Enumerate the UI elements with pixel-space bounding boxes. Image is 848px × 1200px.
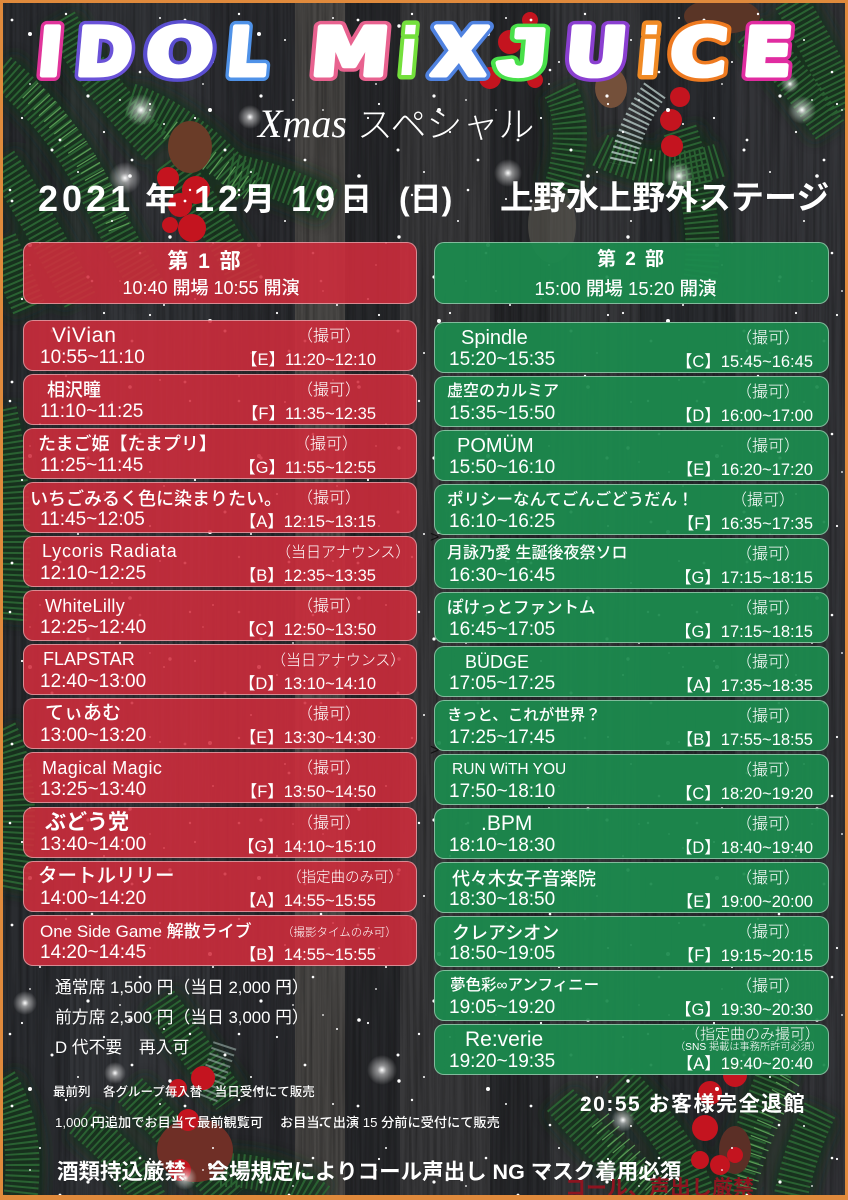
drink note: D 代不要 再入可 [55,1038,189,1057]
part 1 row: いちごみるく色に染まりたい。: 【A】12:15~13:15 [240,513,376,531]
part 2 row: 虚空のカルミア: 15:35~15:50 [449,403,555,424]
part 1 row: One Side Game: 【B】14:55~15:55 [240,946,376,964]
part 1 row: Lycoris Radiata: （当日アナウンス） [276,544,410,561]
part 2 row: 夢色彩∞アンフィニー: 夢色彩∞アンフィニー [450,977,599,994]
part 2 row: Re:verie: 【A】19:40~20:40 [677,1055,813,1073]
part 1 row: 相沢瞳: 相沢瞳 [47,380,101,400]
part 2 row: Re:verie: Re:verie [465,1028,543,1051]
part 2 row: 夢色彩∞アンフィニー [434,970,829,1021]
oshi note: 1,000 円追加でお目当て最前観覧可 お目当て出演 15 分前に受付にて販売 [55,1115,500,1130]
part 2 row: きっと、これが世界？: （撮可） [736,708,800,725]
title: IDOL MiXJUiCE: X [429,14,491,91]
closing time: 20:55 お客様完全退館 [580,1093,806,1116]
part 2 row: Spindle: Spindle [461,327,528,349]
part 2 row: Re:verie: （指定曲のみ撮可） [685,1026,820,1043]
part 1 row: ViVian: ViVian [52,324,117,347]
part 1 row: ぶどう党: 13:40~14:00 [40,834,146,855]
part 1 row: ViVian: 10:55~11:10 [40,347,145,368]
part 2 row: Spindle: （撮可） [736,330,800,347]
title: IDOL MiXJUiCE: L [224,14,271,91]
part 1 row: タートルリリー: 【A】14:55~15:55 [240,892,376,910]
part 1 row: Lycoris Radiata [23,536,417,587]
part 1 row: ViVian: （撮可） [297,328,361,345]
part 1 row: タートルリリー [23,861,417,912]
part 2 row: POMÜM: 15:50~16:10 [449,457,555,478]
part 1 row: たまご姫: （撮可） [294,436,358,453]
part 2 row: 夢色彩∞アンフィニー: （撮可） [736,978,800,995]
part 2 row: Spindle [434,322,829,373]
part 2 row: BÜDGE [434,646,829,697]
part 2 row: .BPM: （撮可） [736,816,800,833]
part 1 row: いちごみるく色に染まりたい。 [23,482,417,533]
date: 月 [243,181,275,217]
date: 年 [145,181,177,217]
date [38,178,452,219]
part 1 row: Magical Magic: 13:25~13:40 [40,779,146,800]
part 2 row: 月詠乃愛 生誕後夜祭ソロ: （撮可） [736,546,800,563]
part 2 row: 代々木女子音楽院: 代々木女子音楽院 [452,869,596,889]
part 2 row: BÜDGE: BÜDGE [465,652,529,672]
part 2 row: POMÜM [434,430,829,481]
title: IDOL MiXJUiCE: E [740,14,796,91]
part 2 row: POMÜM: 【E】16:20~17:20 [677,461,813,479]
title: IDOL MiXJUiCE: I [35,14,66,91]
part 1 row: WhiteLilly: 12:25~12:40 [40,617,146,638]
venue: 上野水上野外ステージ [500,179,829,216]
part 1 row: WhiteLilly [23,590,417,641]
part 2 row: 代々木女子音楽院: 18:30~18:50 [449,889,555,910]
part 2 row: きっと、これが世界？: きっと、これが世界？ [447,707,601,724]
part 1 row: One Side Game: （撮影タイムのみ可） [282,927,397,939]
part 2 row: RUN WiTH YOU [434,754,829,805]
part 1 row: いちごみるく色に染まりたい。: （撮可） [297,490,361,507]
pine cones and snowy branch [157,0,760,1182]
part 1 row: てぃあむ: てぃあむ [45,703,121,724]
part 2 row: 虚空のカルミア: 【D】16:00~17:00 [676,407,813,425]
title: IDOL MiXJUiCE: X [429,14,491,91]
part 1 row: てぃあむ: 13:00~13:20 [40,725,146,746]
part 2 row: きっと、これが世界？: 17:25~17:45 [449,727,555,748]
subtitle: Xmas スペシャル: Xmas スペシャル [258,101,534,146]
part 2 row: Re:verie: （SNS 掲載は事務所許可必須） [675,1042,821,1053]
part 1 row: FLAPSTAR: 12:40~13:00 [40,671,146,692]
part 2 row: 夢色彩∞アンフィニー: 【G】19:30~20:30 [675,1001,813,1019]
marker between columns: > [430,529,439,546]
part 1 row: Magical Magic: Magical Magic [42,758,162,778]
part 1 row: タートルリリー: （指定曲のみ可） [287,870,403,886]
part 2 row: ポリシーなんてごんごどうだん！: ポリシーなんてごんごどうだん！ [447,491,694,509]
part 2 row: RUN WiTH YOU: 17:50~18:10 [449,781,555,802]
part 2 row: 月詠乃愛 生誕後夜祭ソロ: 月詠乃愛 生誕後夜祭ソロ [447,545,627,562]
ticket price: front: 前方席 2,500 円（当日 3,000 円） [55,1008,309,1027]
part 1 row: Lycoris Radiata: 【B】12:35~13:35 [240,567,376,585]
title: IDOL MiXJUiCE: M [308,14,393,91]
date: 日 [340,181,372,217]
part 2 row: 虚空のカルミア [434,376,829,427]
part 2 row: POMÜM: （撮可） [736,438,800,455]
part 2 row: クレアシオン: （撮可） [736,924,800,941]
part 1 row: ViVian: 【E】11:20~12:10 [241,351,376,369]
part 1 row: Lycoris Radiata: 12:10~12:25 [40,563,146,584]
part 2 row: 月詠乃愛 生誕後夜祭ソロ [434,538,829,589]
part 2 row: RUN WiTH YOU: 【C】18:20~19:20 [676,785,813,803]
part 1 row: Magical Magic: （撮可） [297,760,361,777]
part 2 row: クレアシオン: 18:50~19:05 [449,943,555,964]
title: IDOL MiXJUiCE: C [667,14,731,91]
part 1 row: One Side Game: 14:20~14:45 [40,942,146,963]
red note: コール、声出し厳禁 [565,1177,754,1200]
date: 19 [291,178,339,219]
part 2 row: RUN WiTH YOU: RUN WiTH YOU [452,761,566,778]
part 1 row: WhiteLilly: （撮可） [297,598,361,615]
title: IDOL MiXJUiCE: O [143,14,217,91]
title: IDOL MiXJUiCE: U [562,14,631,91]
berries [157,12,747,1181]
part 2 row: 月詠乃愛 生誕後夜祭ソロ: 【G】17:15~18:15 [675,569,813,587]
title: IDOL MiXJUiCE: i [635,14,664,91]
part 1 row: FLAPSTAR: FLAPSTAR [43,649,135,669]
title: IDOL MiXJUiCE: E [740,14,796,91]
part 1 row: 相沢瞳: （撮可） [297,382,361,399]
title: IDOL MiXJUiCE: C [667,14,731,91]
part 1 row: ぶどう党: 【G】14:10~15:10 [238,838,376,856]
part 2 row: .BPM [434,808,829,859]
ticket price: regular: 通常席 1,500 円（当日 2,000 円） [55,978,309,997]
part 2 row: ポリシーなんてごんごどうだん！: （撮可） [731,492,795,509]
title: IDOL MiXJUiCE: i [395,14,422,91]
part 2 row: POMÜM: POMÜM [457,435,534,457]
panel: part 2 header: 15:00 開場 15:20 開演 [534,278,716,299]
panel: part 1 header [23,242,417,304]
part 1 row: ぶどう党: ぶどう党 [45,811,129,834]
part 1 row: たまご姫: 【G】11:55~12:55 [239,459,376,477]
part 1 row: Lycoris Radiata: Lycoris Radiata [42,541,177,561]
part 1 row: WhiteLilly: 【C】12:50~13:50 [239,621,376,639]
part 2 row: Re:verie: 19:20~19:35 [449,1051,555,1072]
part 1 row: たまご姫 [23,428,417,479]
part 1 row: いちごみるく色に染まりたい。: 11:45~12:05 [40,509,145,530]
part 1 row: WhiteLilly: WhiteLilly [45,596,125,616]
part 2 row: BÜDGE: 17:05~17:25 [449,673,555,694]
part 2 row: .BPM: .BPM [481,812,532,835]
part 2 row: ポリシーなんてごんごどうだん！: 【F】16:35~17:35 [678,515,813,533]
part 1 row: 相沢瞳 [23,374,417,425]
part 1 row: ぶどう党: （撮可） [297,815,361,832]
part 1 row: FLAPSTAR [23,644,417,695]
part 1 row: たまご姫: 11:25~11:45 [40,455,143,476]
part 1 row: Magical Magic: 【F】13:50~14:50 [241,783,376,801]
part 1 row: FLAPSTAR: 【D】13:10~14:10 [239,675,376,693]
part 2 row: クレアシオン: クレアシオン [452,923,559,943]
front row note: 最前列 各グループ毎入替 当日受付にて販売 [53,1085,315,1099]
part 2 row: 代々木女子音楽院: （撮可） [736,870,800,887]
part 2 row: ぽけっとファントム: （撮可） [736,600,800,617]
part 2 row: クレアシオン [434,916,829,967]
part 1 row: ViVian [23,320,417,371]
part 2 row: Spindle: 15:20~15:35 [449,349,555,370]
part 1 row: タートルリリー: タートルリリー [38,865,175,887]
part 2 row: きっと、これが世界？ [434,700,829,751]
part 1 row: たまご姫: たまご姫【たまプリ】 [38,434,217,454]
part 1 row: One Side Game: One Side Game 解散ライブ [40,922,252,941]
part 2 row: ぽけっとファントム: 【G】17:15~18:15 [675,623,813,641]
part 1 row: FLAPSTAR: （当日アナウンス） [271,652,405,669]
part 1 row: One Side Game [23,915,417,966]
title: IDOL MiXJUiCE: i [395,14,422,91]
rules: 酒類持込厳禁 会場規定によりコール声出し NG マスク着用必須 [57,1160,681,1184]
date: 2021 [38,178,134,219]
part 2 row: BÜDGE: 【A】17:35~18:35 [677,677,813,695]
title: IDOL MiXJUiCE: J [495,16,550,90]
title: IDOL MiXJUiCE: i [635,14,664,91]
title: IDOL MiXJUiCE: M [308,14,393,91]
part 1 row: 相沢瞳: 11:10~11:25 [40,401,143,422]
date: 12 [194,178,242,219]
part 2 row: 月詠乃愛 生誕後夜祭ソロ: 16:30~16:45 [449,565,555,586]
part 1 row: ぶどう党 [23,807,417,858]
part 2 row: 虚空のカルミア: 虚空のカルミア [447,383,559,400]
part 2 row: .BPM: 【D】18:40~19:40 [676,839,813,857]
part 2 row: ぽけっとファントム: 16:45~17:05 [449,619,555,640]
part 2 row: Re:verie [434,1024,829,1075]
part 2 row: BÜDGE: （撮可） [736,654,800,671]
part 1 row: いちごみるく色に染まりたい。: いちごみるく色に染まりたい。 [30,489,282,509]
part 1 row: てぃあむ [23,698,417,749]
part 2 row: 虚空のカルミア: （撮可） [736,384,800,401]
part 2 row: 代々木女子音楽院 [434,862,829,913]
title: IDOL MiXJUiCE: I [35,14,66,91]
part 1 row: Magical Magic [23,752,417,803]
part 2 row: ぽけっとファントム: ぽけっとファントム [447,599,596,617]
part 2 row: きっと、これが世界？: 【B】17:55~18:55 [677,731,813,749]
date: (日) [399,181,452,217]
part 1 row: 相沢瞳: 【F】11:35~12:35 [242,405,376,423]
panel: part 1 header: 第 1 部 [167,250,243,273]
title: IDOL MiXJUiCE [35,14,796,91]
part 1 row: タートルリリー: 14:00~14:20 [40,888,146,909]
part 2 row: 夢色彩∞アンフィニー: 19:05~19:20 [449,997,555,1018]
part 2 row: Spindle: 【C】15:45~16:45 [676,353,813,371]
title: IDOL MiXJUiCE: D [73,14,136,91]
part 2 row: クレアシオン: 【F】19:15~20:15 [678,947,813,965]
part 2 row: RUN WiTH YOU: （撮可） [736,762,800,779]
part 2 row: ポリシーなんてごんごどうだん！: 16:10~16:25 [449,511,555,532]
part 2 row: ぽけっとファントム [434,592,829,643]
part 2 row: .BPM: 18:10~18:30 [449,835,555,856]
title: IDOL MiXJUiCE: L [224,14,271,91]
panel: part 2 header [434,242,829,304]
title: IDOL MiXJUiCE: O [143,14,217,91]
part 1 row: てぃあむ: （撮可） [297,706,361,723]
part 2 row: ポリシーなんてごんごどうだん！ [434,484,829,535]
panel: part 1 header: 10:40 開場 10:55 開演 [122,278,300,298]
title: IDOL MiXJUiCE: D [73,14,136,91]
part 2 row: 代々木女子音楽院: 【E】19:00~20:00 [677,893,813,911]
part 1 row: てぃあむ: 【E】13:30~14:30 [240,729,376,747]
title: IDOL MiXJUiCE: U [562,14,631,91]
marker lower: > [430,742,439,759]
panel: part 2 header: 第 2 部 [597,249,666,270]
title: IDOL MiXJUiCE: J [495,16,550,90]
